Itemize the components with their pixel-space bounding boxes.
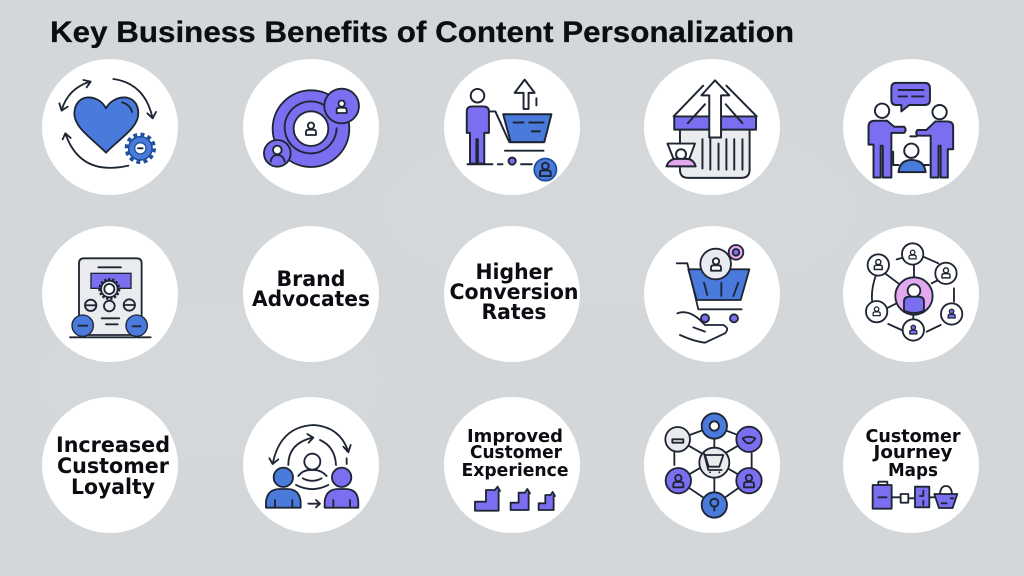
icon: basket with upward arrow (644, 59, 780, 195)
label: Increased Customer Loyalty: Customer (57, 454, 170, 478)
icon: control panel with gear (42, 226, 178, 362)
label: Customer Journey Maps with path icons: Journey (871, 442, 953, 463)
label: Brand Advocates: Advocates (252, 287, 370, 311)
label: Improved Customer Experience with steps: Experience (462, 460, 568, 481)
icon: concentric rings with customers (243, 59, 379, 195)
label: Improved Customer Experience with steps: Customer (470, 442, 562, 463)
label: Improved Customer Experience with steps: Improved (467, 426, 563, 447)
icon: two people talking with speech bubble (843, 59, 979, 195)
icon: shopping hub with connected nodes (644, 397, 780, 533)
label: Higher Conversion Rates (444, 226, 580, 362)
label: Customer Journey Maps with path icons: Maps (888, 460, 938, 481)
title: Key Business Benefits of Content Personalization (50, 16, 794, 49)
label: Higher Conversion Rates: Rates (482, 300, 546, 325)
label: Customer Journey Maps with path icons (843, 397, 979, 533)
label: Higher Conversion Rates: Higher (476, 260, 553, 285)
label: Increased Customer Loyalty: Loyalty (71, 475, 155, 499)
label: Improved Customer Experience with steps (444, 397, 580, 533)
label: Increased Customer Loyalty (42, 397, 178, 533)
label: Increased Customer Loyalty: Increased (56, 433, 170, 457)
icon: person with shopping cart (444, 59, 580, 195)
icon: heart with cycle arrows and gear (42, 59, 178, 195)
label: Higher Conversion Rates: Conversion (450, 280, 578, 305)
icon: two customers with cycle arrows (243, 397, 379, 533)
heart (74, 97, 138, 153)
icon: customer network (843, 226, 979, 362)
label: Customer Journey Maps with path icons: Customer (866, 426, 961, 447)
icon: shopping cart on a hand (644, 226, 780, 362)
label: Brand Advocates (243, 226, 379, 362)
label: Brand Advocates: Brand (276, 267, 346, 291)
